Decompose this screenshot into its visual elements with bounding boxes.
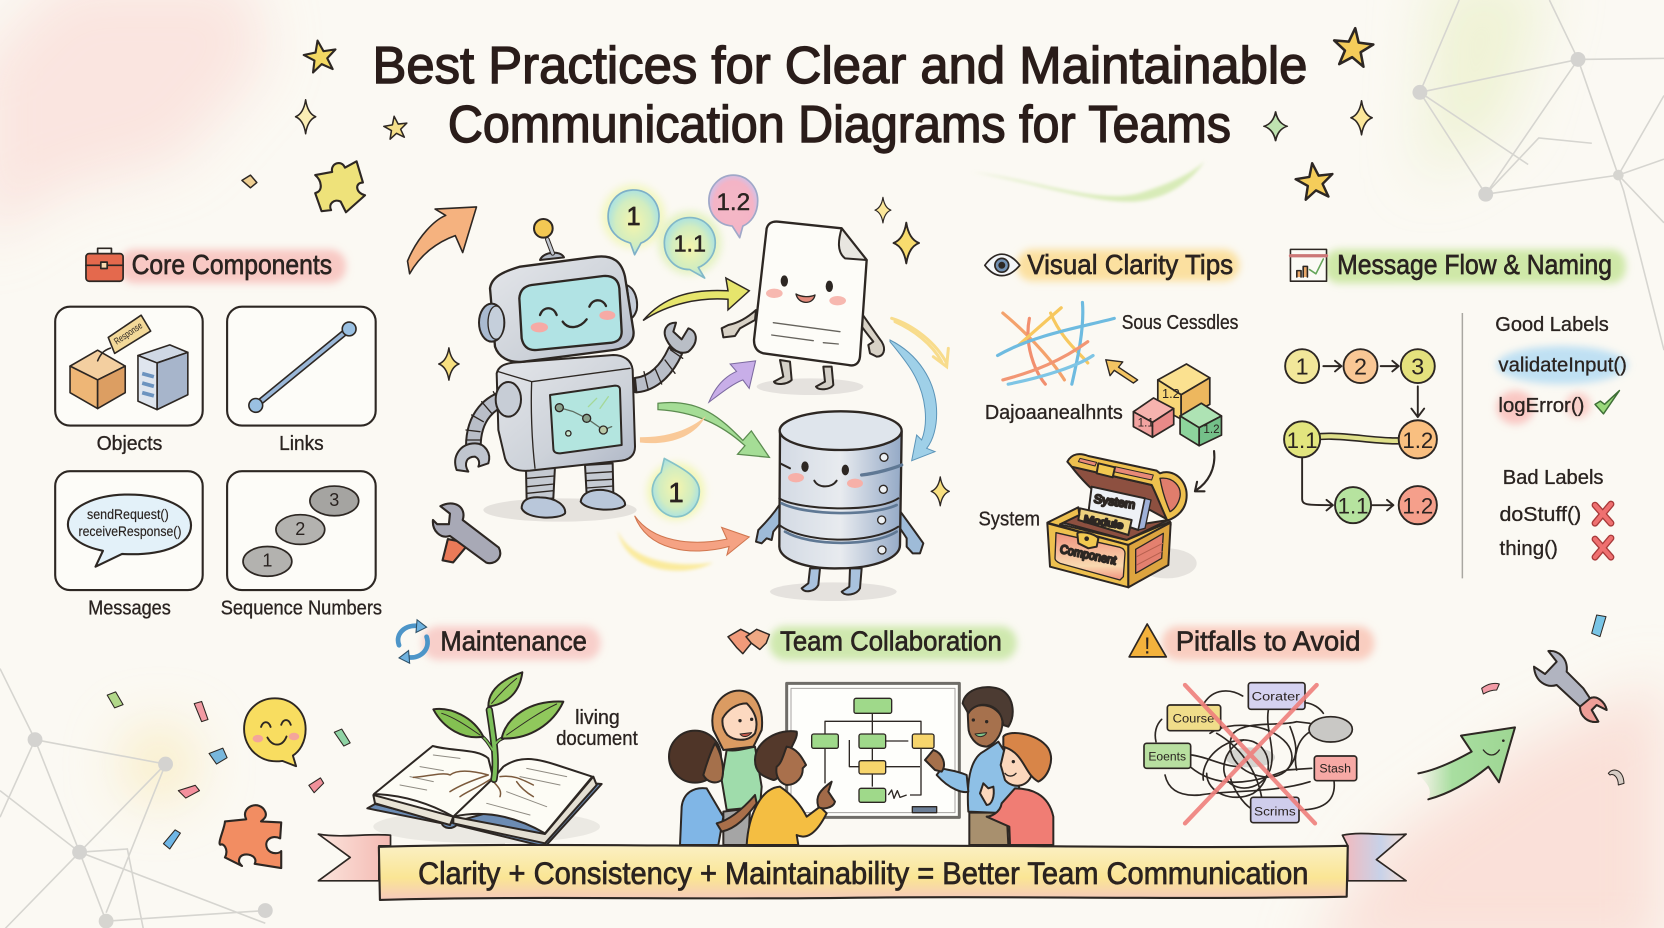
person: boy in yellow xyxy=(747,731,835,845)
flow: numbered sequence: 2 xyxy=(1354,354,1367,380)
illustration: whiteboard with flowchart xyxy=(787,683,959,817)
card: objects: Response xyxy=(112,320,145,347)
flow: numbered sequence xyxy=(1284,349,1437,524)
illustration: tangled diagram with red X: Stash xyxy=(1319,762,1351,776)
network pattern top right xyxy=(1412,0,1664,350)
illustration: tangled diagram with red X xyxy=(1144,683,1357,823)
arrow: orange up-right xyxy=(408,207,476,274)
flow: numbered sequence: 1 xyxy=(1296,354,1309,380)
panel: core components xyxy=(55,248,382,619)
person: boy in blue xyxy=(669,731,757,845)
illustration: number bubbles: 1.2 xyxy=(716,189,750,216)
arrows: message flow between characters xyxy=(618,278,948,571)
label: garbled caption two: Dajoaanealhnts xyxy=(985,402,1123,424)
icon: smiley speech bubble xyxy=(244,698,306,766)
decorations: bottom left smiley, puzzle and confetti xyxy=(107,692,350,868)
heading: core components: Core Components xyxy=(132,249,332,280)
arrow: pale yellow curved xyxy=(892,318,948,367)
flow: numbered sequence: 1.1 xyxy=(1287,428,1318,453)
ribbon body xyxy=(379,845,1348,900)
illustration: treasure chest: Module xyxy=(1083,514,1125,532)
label list: good labels: validateInput() xyxy=(1498,354,1627,376)
illustration: tangled coloured lines xyxy=(998,302,1114,384)
icon: green smiling arrow xyxy=(1418,727,1515,799)
panel: maintenance xyxy=(367,620,638,847)
panel: message flow and naming xyxy=(1284,249,1628,578)
panel: visual clarity tips xyxy=(978,249,1240,587)
banner: summary ribbon xyxy=(318,833,1406,900)
illustration: database character xyxy=(756,411,923,601)
illustration: tangled diagram with red X: Corater xyxy=(1252,690,1300,704)
heading: pitfalls to avoid xyxy=(1129,624,1374,660)
flow: numbered sequence: 1.2 xyxy=(1402,494,1433,519)
illustration: stacked blocks: 1.2 xyxy=(1162,386,1180,401)
heading: pitfalls to avoid: Pitfalls to Avoid xyxy=(1176,626,1360,657)
ribbon tail right xyxy=(1342,833,1406,881)
card: objects xyxy=(55,307,203,426)
card: sequence numbers: 1 xyxy=(262,551,272,571)
arrow: yellow swoosh xyxy=(618,531,713,571)
ribbon tail left xyxy=(318,834,391,881)
illustration: stacked blocks xyxy=(1133,364,1221,446)
flow: numbered sequence: 3 xyxy=(1411,354,1424,380)
card: messages: receiveResponse() xyxy=(79,524,181,539)
person: red-haired kid xyxy=(980,733,1053,845)
illustration: tangled diagram with red X: Scrims xyxy=(1254,804,1296,818)
title xyxy=(372,37,1307,154)
icon: orange puzzle piece xyxy=(220,805,281,868)
arrow: to tangled lines xyxy=(1106,360,1138,383)
label: sequence numbers: Sequence Numbers xyxy=(221,597,382,619)
label list: good labels: logError() xyxy=(1498,395,1584,417)
heading: visual clarity tips: Visual Clarity Tips xyxy=(1027,249,1233,280)
green brush stroke under title xyxy=(971,161,1204,202)
label: messages: Messages xyxy=(88,597,171,619)
flow: numbered sequence: 1.1 xyxy=(1338,494,1369,519)
confetti right xyxy=(1482,615,1624,785)
label: garbled caption one: Sous Cessdles xyxy=(1122,312,1238,334)
label list: bad labels: Bad Labels xyxy=(1503,467,1604,489)
icon: yellow puzzle piece xyxy=(315,161,365,212)
label: living document xyxy=(556,707,638,750)
icon: number bubble lower: 1 xyxy=(668,477,684,508)
heading: pitfalls to avoid: ! xyxy=(1144,633,1150,659)
title: Best Practices for Clear and Maintainable xyxy=(372,37,1307,95)
decorative stars and sparkles xyxy=(296,26,1375,506)
arrow: coral to database xyxy=(635,516,749,555)
label list: bad labels: thing() xyxy=(1500,538,1558,560)
label list: bad labels: doStuff() xyxy=(1500,504,1581,526)
card: messages: sendRequest() xyxy=(87,507,169,522)
arrow: curved down to chest xyxy=(1195,451,1214,491)
label: system: System xyxy=(978,508,1040,530)
label list: good labels xyxy=(1495,314,1628,424)
card: sequence numbers xyxy=(227,471,376,590)
panel: pitfalls to avoid xyxy=(1129,624,1374,823)
arrow: yellow robot to document xyxy=(643,278,749,320)
illustration: team people xyxy=(669,687,1053,845)
arrow: orange small swoosh xyxy=(640,416,706,443)
network pattern bottom left xyxy=(0,669,273,928)
panel: team collaboration xyxy=(669,626,1053,845)
illustration: book with sprouting plant xyxy=(367,672,602,847)
label: links: Links xyxy=(279,433,324,455)
icon: number bubble lower xyxy=(647,458,705,520)
icon: wrench left xyxy=(433,503,500,563)
card: sequence numbers: 3 xyxy=(329,490,339,510)
person: man in blue shirt xyxy=(925,687,1020,845)
illustration: number bubbles: 1.1 xyxy=(674,231,706,257)
arrow: purple up xyxy=(709,361,756,402)
card: messages xyxy=(55,471,203,590)
illustration: robot xyxy=(455,219,696,522)
illustration: treasure chest: Component xyxy=(1059,542,1118,568)
icon: small tan scrap xyxy=(242,175,257,188)
title: Communication Diagrams for Teams xyxy=(448,96,1231,154)
arrow: green to database xyxy=(658,402,769,457)
label: objects: Objects xyxy=(97,433,162,455)
heading: maintenance: Maintenance xyxy=(440,626,587,657)
label list: bad labels xyxy=(1500,467,1611,560)
flow: numbered sequence: 1.2 xyxy=(1402,428,1433,453)
illustration: treasure chest: System xyxy=(1093,491,1136,512)
illustration: tangled diagram with red X: Eoents xyxy=(1148,750,1186,764)
illustration: document character xyxy=(722,222,884,395)
arrow: blue curved xyxy=(890,340,937,461)
heading: maintenance xyxy=(398,620,601,663)
illustration: stacked blocks: 1.2 xyxy=(1203,423,1220,436)
confetti left xyxy=(107,692,350,849)
illustration: stacked blocks: 1.1 xyxy=(1138,417,1154,430)
person: woman with green shirt xyxy=(712,691,762,845)
illustration: number bubbles: 1 xyxy=(626,203,641,231)
banner text: Clarity + Consistency + Maintainability = Better Team Communication xyxy=(418,856,1308,891)
heading: team collaboration: Team Collaboration xyxy=(780,626,1002,657)
label: living document: document xyxy=(556,728,638,750)
label: living document: living xyxy=(575,707,620,729)
card: sequence numbers: 2 xyxy=(295,519,305,539)
icon: gray wrench xyxy=(1534,651,1607,722)
decorations: bottom right wrench, arrow and confetti xyxy=(1418,615,1624,799)
heading: message flow and naming: Message Flow & Naming xyxy=(1337,249,1612,280)
illustration: treasure chest xyxy=(1047,454,1197,587)
label list: good labels: Good Labels xyxy=(1495,314,1609,336)
illustration: tangled diagram with red X: Course xyxy=(1173,712,1215,726)
illustration: number bubbles xyxy=(602,175,758,278)
card: links xyxy=(227,307,376,426)
